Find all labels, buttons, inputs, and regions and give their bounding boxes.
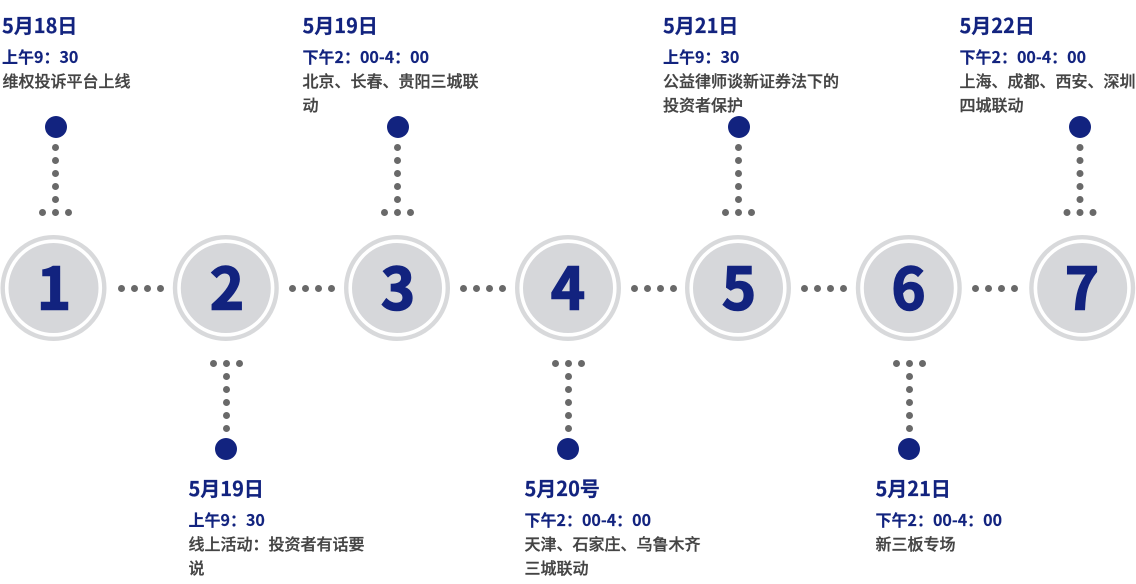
event 6 text <box>876 473 1002 555</box>
step circle 7: 7 <box>1065 242 1099 326</box>
event 4 connector <box>552 360 585 460</box>
event 4 text: 天津、石家庄、乌鲁木齐 <box>524 531 701 555</box>
event 2 connector <box>210 360 243 460</box>
event 5 connector <box>722 116 755 216</box>
event 7 text <box>960 10 1136 116</box>
event 4 text <box>524 473 701 579</box>
event 3 text <box>302 10 479 116</box>
event 5 text: 5月21日 <box>663 10 738 39</box>
event 1 connector <box>39 116 72 216</box>
event 7 connector <box>1064 116 1096 216</box>
event 4 text: 下午2：00-4：00 <box>524 507 651 531</box>
event 2 text: 说 <box>188 555 205 579</box>
dotted link 4-5 <box>631 285 677 292</box>
event 4 text: 5月20号 <box>524 473 600 502</box>
step circle 4: 4 <box>551 242 585 326</box>
event 5 text <box>663 10 839 116</box>
event 3 text: 北京、长春、贵阳三城联 <box>302 68 479 92</box>
event 3 text: 5月19日 <box>302 10 378 39</box>
dotted link 5-6 <box>801 285 847 292</box>
step circle 4 <box>517 237 619 339</box>
event 6 text: 下午2：00-4：00 <box>876 507 1002 531</box>
event 6 connector <box>893 360 926 460</box>
event 7 text: 下午2：00-4：00 <box>960 44 1086 68</box>
event 6 text: 5月21日 <box>876 473 951 502</box>
step circle 6: 6 <box>891 242 926 326</box>
event 2 text <box>188 473 365 579</box>
event 5 text: 投资者保护 <box>663 92 743 116</box>
event 7 text: 四城联动 <box>960 92 1024 116</box>
event 5 text: 公益律师谈新证券法下的 <box>663 68 839 92</box>
event 3 text: 下午2：00-4：00 <box>302 44 429 68</box>
step circle 2: 2 <box>210 242 244 326</box>
event 1 text: 5月18日 <box>2 10 77 39</box>
event 2 text: 上午9：30 <box>188 507 265 531</box>
event 7 text: 5月22日 <box>960 10 1035 39</box>
step circle 5: 5 <box>722 242 756 326</box>
event 3 text: 动 <box>302 92 319 116</box>
step circle 7 <box>1031 237 1133 339</box>
step circle 1 <box>3 237 104 339</box>
dotted link 6-7 <box>972 285 1018 292</box>
step circle 3: 3 <box>381 242 415 326</box>
event 2 text: 线上活动：投资者有话要 <box>188 531 365 555</box>
step circle 6 <box>858 237 960 339</box>
event 3 connector <box>381 116 414 216</box>
step circle 1: 1 <box>37 242 71 326</box>
step circle 3 <box>346 237 448 339</box>
step circle 5 <box>687 237 789 339</box>
step circle 2 <box>175 237 277 339</box>
dotted link 2-3 <box>289 285 335 292</box>
event 1 text <box>2 10 131 92</box>
event 4 text: 三城联动 <box>524 555 589 579</box>
event 2 text: 5月19日 <box>188 473 264 502</box>
dotted link 1-2 <box>118 285 164 292</box>
event 1 text: 上午9：30 <box>2 44 78 68</box>
event 1 text: 维权投诉平台上线 <box>2 68 131 92</box>
event 5 text: 上午9：30 <box>663 44 739 68</box>
event 7 text: 上海、成都、西安、深圳 <box>960 68 1136 92</box>
event 6 text: 新三板专场 <box>876 531 956 555</box>
dotted link 3-4 <box>460 285 506 292</box>
